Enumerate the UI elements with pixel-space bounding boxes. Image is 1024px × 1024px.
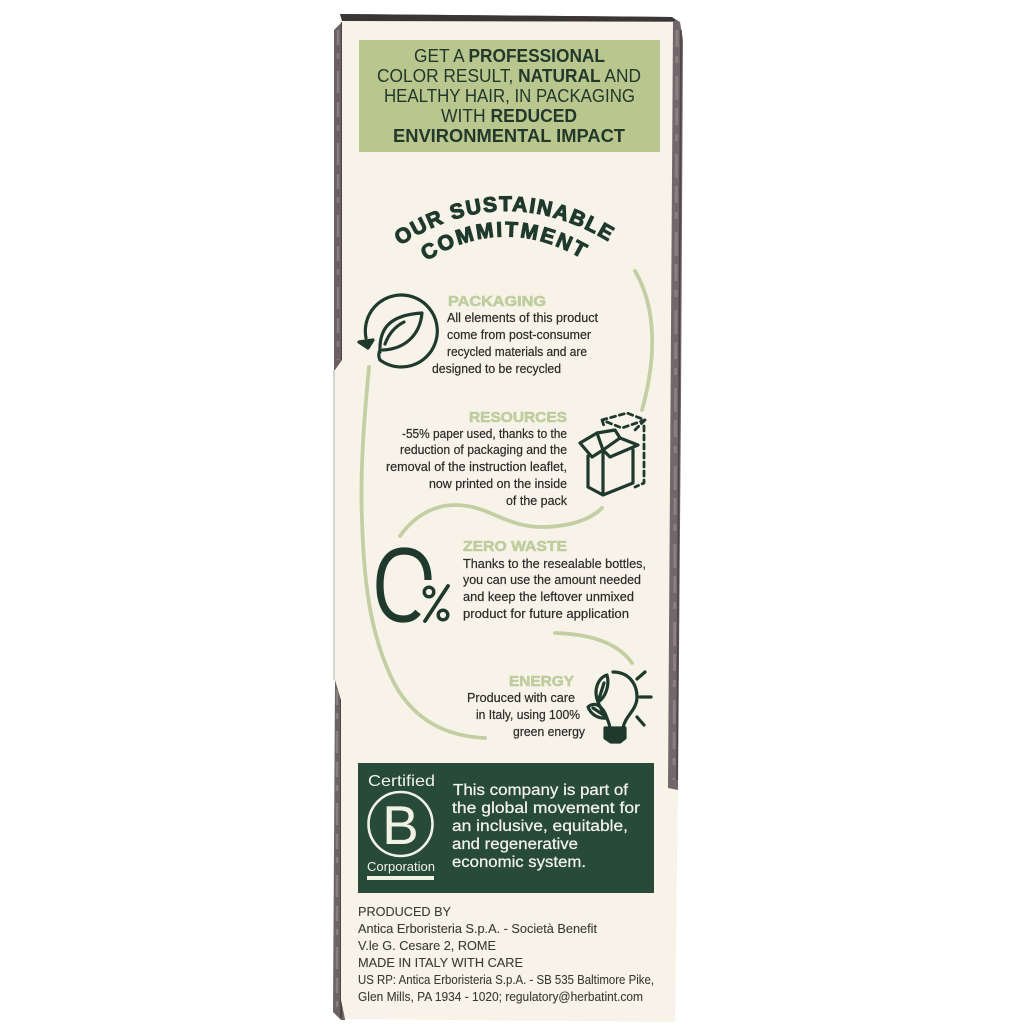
section: energy [467,673,585,739]
section: zero waste: Thanks to the resealable bottles, [463,556,646,571]
box edges [333,14,683,1022]
B Corp logo: B [382,794,419,856]
producer details: PRODUCED BY [358,904,451,919]
producer details: Glen Mills, PA 1934 - 1020; regulatory@herbatint.com [358,989,643,1004]
icon: box with dashed outline [580,413,645,495]
section: packaging [432,293,598,376]
B Corp text: This company is part of [453,782,629,799]
section: resources: -55% paper used, thanks to the [402,426,567,441]
curved title: COMMITMENT [421,221,589,259]
green intro banner: GET A PROFESSIONAL [414,46,605,66]
section: resources [386,409,567,508]
B Corp text [452,782,640,871]
section: packaging: come from post-consumer [447,327,592,342]
curved title: OUR SUSTAINABLE [395,196,616,244]
icon: recycled leaf [359,295,437,367]
section: zero waste: you can use the amount needed [463,572,641,587]
producer details: MADE IN ITALY WITH CARE [358,955,523,970]
section: zero waste: ZERO WASTE [463,538,567,555]
section: energy: in Italy, using 100% [476,707,580,722]
section: zero waste: and keep the leftover unmixed [463,589,634,604]
producer details: US RP: Antica Erboristeria S.p.A. - SB 535 Baltimore Pike, [358,972,654,987]
panel: B Corp statement [358,763,654,893]
section: zero waste [463,538,646,621]
section: energy: ENERGY [509,673,574,690]
B Corp logo: Certified [368,773,435,790]
section: resources: removal of the instruction leaflet, [386,459,567,474]
section: resources: RESOURCES [469,409,567,426]
B Corp text: an inclusive, equitable, [452,818,628,835]
section: resources: reduction of packaging and the [400,442,567,457]
section: resources: now printed on the inside [429,476,567,491]
icon: zero percent [380,551,448,621]
B Corp text: and regenerative [452,836,578,853]
section: resources: of the pack [506,493,567,508]
section: energy: Produced with care [467,690,575,705]
icon: light bulb with leaves [588,672,651,742]
green intro banner: COLOR RESULT, NATURAL AND [377,66,641,86]
B Corp text: the global movement for [452,800,640,817]
section: packaging: PACKAGING [448,293,546,310]
section: packaging: recycled materials and are [447,344,587,359]
green intro banner: HEALTHY HAIR, IN PACKAGING [384,86,635,106]
producer details: Antica Erboristeria S.p.A. - Società Benefit [358,921,597,936]
producer details [358,904,654,1004]
B Corp logo: Corporation [367,860,435,874]
section: packaging: All elements of this product [447,310,598,325]
green intro banner: ENVIRONMENTAL IMPACT [393,126,625,146]
B Corp logo [367,773,435,880]
section: packaging: designed to be recycled [432,361,561,376]
section: energy: green energy [513,724,585,739]
B Corp text: economic system. [452,854,586,871]
connecting curves [361,271,652,738]
green intro banner: WITH REDUCED [441,106,577,126]
green intro banner [359,40,660,152]
section: zero waste: product for future application [463,606,629,621]
producer details: V.le G. Cesare 2, ROME [358,938,496,953]
